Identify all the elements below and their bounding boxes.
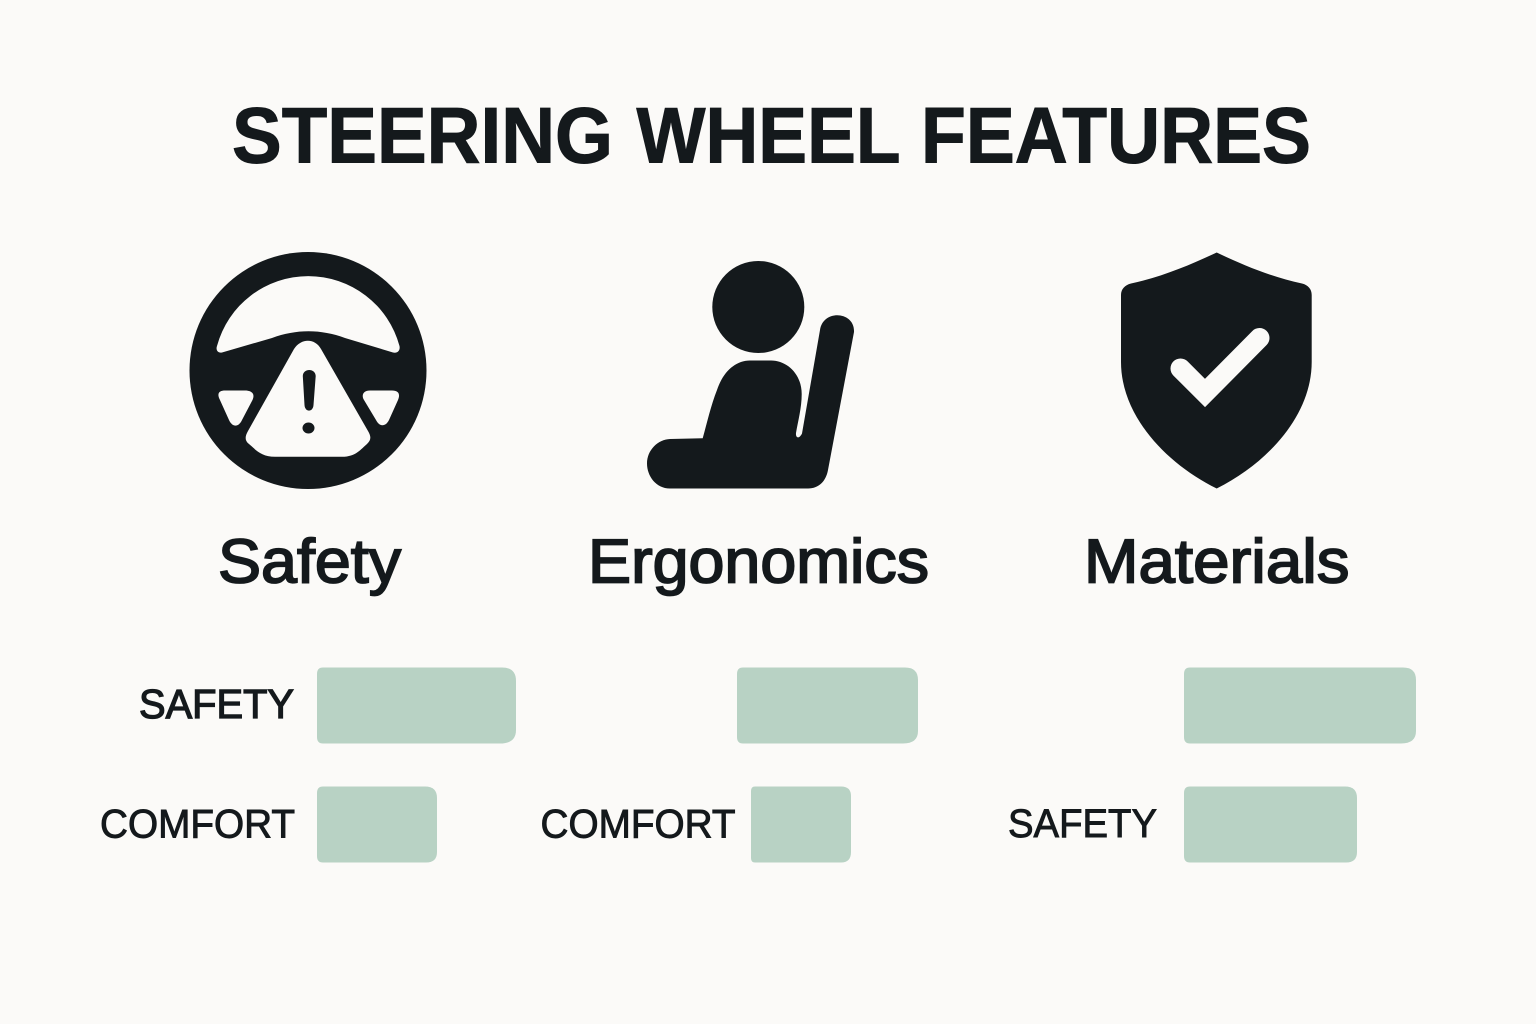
bar label: SAFETY: SAFETY (139, 681, 294, 727)
bar group: materials column (1008, 668, 1416, 862)
bar: comfort (317, 786, 437, 862)
bar group: safety column (100, 668, 516, 862)
title: STEERING (232, 90, 613, 180)
icon: seated person (647, 261, 854, 488)
heading: Safety: Safety (218, 528, 401, 596)
bar label: COMFORT: COMFORT (100, 802, 295, 846)
bar label: SAFETY: SAFETY (1008, 802, 1157, 846)
bar: safety (317, 668, 516, 744)
bar group: ergonomics column (540, 668, 918, 862)
bar: safety (1184, 786, 1357, 862)
heading: Materials: Materials (1084, 528, 1350, 596)
heading: Ergonomics: Ergonomics (588, 528, 929, 596)
title: FEATURES (921, 90, 1311, 180)
title (232, 90, 1311, 180)
bar: comfort (751, 786, 851, 862)
bar label: COMFORT: COMFORT (540, 802, 736, 846)
bar: unlabelled top (1184, 668, 1416, 744)
icon: shield with check mark (1121, 252, 1312, 488)
bar: unlabelled top (737, 668, 918, 744)
title: WHEEL (636, 90, 900, 180)
icon: steering wheel with warning triangle (190, 252, 426, 489)
